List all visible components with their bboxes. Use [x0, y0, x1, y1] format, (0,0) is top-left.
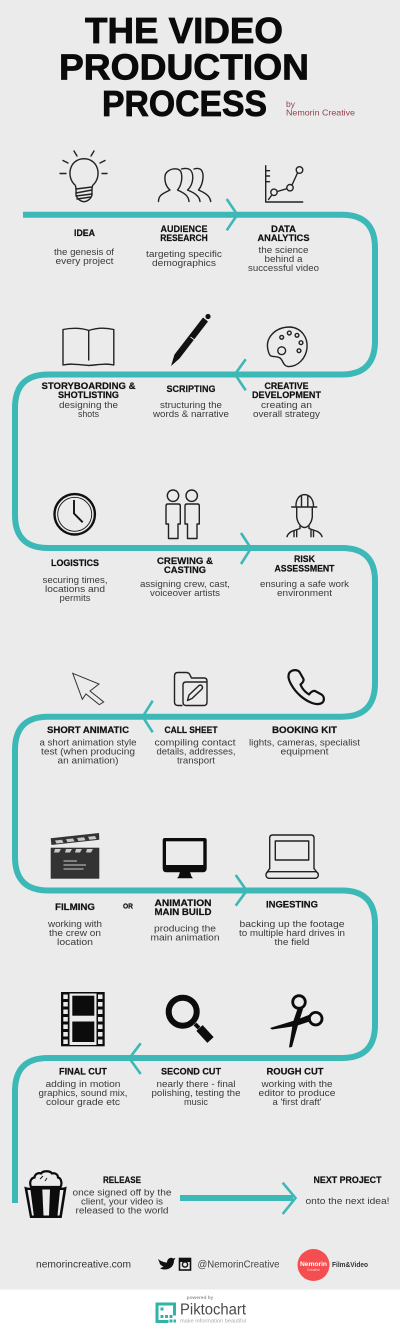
arrow: row 2 chevron: [235, 359, 246, 390]
step: audience research: RESEARCH: [160, 233, 208, 244]
logo: Nemorin Film and Video: Creative: [307, 1268, 320, 1272]
icon: worker with hard hat: [287, 495, 322, 537]
step: release: client, your video is: [81, 1196, 163, 1208]
step: creative development: overall strategy: [253, 409, 320, 420]
step: rough cut: a 'first draft': [272, 1097, 322, 1108]
byline: [286, 99, 355, 118]
icon: folder with pen: [174, 672, 207, 706]
byline: Nemorin Creative: [286, 108, 355, 118]
icon: magnifying glass: [169, 998, 210, 1040]
step: short animatic: an animation): [58, 756, 118, 766]
step: call sheet: CALL SHEET: [164, 725, 218, 736]
step: next project: onto the next idea!: [306, 1196, 390, 1207]
step: data analytics: behind a: [264, 254, 303, 265]
step: audience research: [146, 168, 222, 269]
website link: nemorincreative.com: [36, 1258, 131, 1270]
arrow: row 4 chevron: [143, 701, 153, 732]
step: risk assessment: RISK: [294, 554, 315, 565]
icon: audience silhouettes: [158, 168, 211, 202]
step: rough cut: [258, 996, 336, 1108]
icon: telephone handset: [289, 670, 324, 704]
step: crewing and casting: assigning crew, cast,: [140, 579, 230, 590]
step: release: once signed off by the: [72, 1188, 172, 1198]
step: release: released to the world: [76, 1206, 168, 1216]
step: filming: working with: [47, 919, 102, 930]
step: creative development: [252, 327, 321, 420]
footer: Piktochart band: powered by: [187, 1295, 214, 1301]
step: filming: the crew on: [49, 928, 101, 939]
step: creative development: CREATIVE: [264, 381, 309, 392]
step: logistics: LOGISTICS: [51, 558, 100, 569]
step: audience research: demographics: [152, 258, 216, 269]
step: ingesting: [239, 835, 345, 948]
step: logistics: securing times,: [42, 575, 108, 586]
footer: Piktochart band: Piktochart: [180, 1302, 247, 1318]
icon: twitter bird: [158, 1258, 176, 1270]
logo: Nemorin Film and Video: [298, 1249, 368, 1281]
or label: OR: [123, 904, 133, 910]
step: call sheet: compiling contact: [154, 738, 236, 748]
footer: Piktochart band: make information beautiful: [180, 1318, 246, 1324]
step: ingesting: to multiple hard drives in: [239, 928, 345, 939]
step: short animatic: a short animation style: [40, 738, 136, 748]
step: scripting: words & narrative: [152, 409, 229, 420]
step: ingesting: INGESTING: [266, 900, 318, 910]
title: [59, 10, 309, 124]
step: short animatic: SHORT ANIMATIC: [47, 725, 129, 736]
byline: by: [286, 99, 296, 109]
step: filming: [47, 833, 102, 948]
step: storyboarding and shotlisting: STORYBOARDING &: [42, 381, 136, 392]
icon: paint palette: [267, 327, 307, 367]
icon: two people: [166, 490, 199, 538]
step: second cut: [152, 998, 240, 1108]
logo: Nemorin Film and Video: Film&Video: [332, 1260, 368, 1269]
step: second cut: polishing, testing the: [152, 1088, 240, 1099]
step: short animatic: [40, 673, 136, 766]
step: rough cut: working with the: [260, 1079, 332, 1090]
icon: cursor arrow: [73, 673, 104, 705]
footer: Piktochart band: [0, 1290, 400, 1329]
step: final cut: colour grade etc: [46, 1097, 120, 1108]
step: idea: the genesis of: [54, 247, 114, 258]
step: risk assessment: [260, 495, 349, 599]
step: crewing and casting: [140, 490, 230, 599]
step: second cut: SECOND CUT: [161, 1066, 221, 1078]
step: storyboarding and shotlisting: shots: [78, 409, 99, 420]
step: data analytics: the science: [258, 245, 308, 256]
arrow: row 1 chevron: [227, 199, 237, 230]
title: PRODUCTION: [59, 46, 309, 88]
step: data analytics: [248, 166, 319, 274]
step: short animatic: test (when producing: [41, 746, 135, 758]
step: second cut: music: [184, 1097, 208, 1108]
step: logistics: [42, 494, 108, 604]
step: booking kit: BOOKING KIT: [272, 725, 337, 736]
step: ingesting: backing up the footage: [240, 919, 344, 930]
step: animation main build: ANIMATION: [154, 898, 212, 909]
step: rough cut: editor to produce: [258, 1088, 336, 1099]
step: audience research: targeting specific: [146, 249, 222, 260]
logo: Nemorin Film and Video: Nemorin: [300, 1261, 327, 1268]
icon: popcorn bucket: [24, 1171, 67, 1218]
step: logistics: locations and: [45, 584, 105, 595]
step: scripting: [152, 314, 229, 420]
step: filming: location: [57, 937, 93, 948]
step: final cut: FINAL CUT: [59, 1066, 107, 1078]
icon: Piktochart logo: [156, 1302, 176, 1323]
step: creative development: DEVELOPMENT: [252, 390, 321, 401]
arrow: row 5 chevron: [236, 875, 247, 906]
step: booking kit: [249, 670, 360, 758]
arrow: row 6 chevron: [129, 1043, 141, 1074]
step: crewing and casting: voiceover artists: [150, 588, 220, 599]
social handle: @NemorinCreative: [198, 1258, 280, 1270]
step: release: [24, 1171, 171, 1218]
step: release: RELEASE: [103, 1175, 141, 1186]
step: risk assessment: ensuring a safe work: [260, 579, 349, 590]
step: idea: every project: [56, 256, 114, 267]
icon: laptop: [266, 835, 318, 878]
icon: open book: [63, 328, 114, 366]
icon: scissors: [270, 996, 322, 1048]
step: ingesting: the field: [274, 937, 310, 948]
step: final cut: adding in motion: [46, 1079, 120, 1090]
step: logistics: permits: [60, 593, 91, 604]
step: call sheet: details, addresses,: [156, 746, 236, 758]
step: booking kit: equipment: [280, 746, 329, 758]
step: creative development: creating an: [261, 400, 312, 411]
icon: pen: [171, 314, 211, 366]
step: animation main build: main animation: [150, 932, 220, 944]
step: storyboarding and shotlisting: SHOTLISTING: [58, 390, 119, 401]
timeline path: [15, 215, 375, 1203]
step: audience research: AUDIENCE: [160, 224, 208, 235]
icon: film strip: [61, 992, 105, 1046]
step: rough cut: ROUGH CUT: [266, 1066, 324, 1078]
icon: instagram: [180, 1258, 190, 1270]
title: PROCESS: [102, 83, 267, 124]
step: filming: FILMING: [55, 902, 95, 913]
step: next project: NEXT PROJECT: [314, 1175, 382, 1186]
step: scripting: structuring the: [160, 400, 222, 411]
step: animation main build: [150, 838, 220, 944]
step: idea: [54, 151, 114, 267]
step: idea: IDEA: [74, 228, 95, 239]
step: risk assessment: ASSESSMENT: [274, 564, 335, 574]
step: data analytics: ANALYTICS: [258, 233, 310, 244]
step: crewing and casting: CREWING &: [157, 556, 213, 567]
step: crewing and casting: CASTING: [164, 565, 206, 576]
step: data analytics: DATA: [271, 224, 296, 235]
icon: clock: [54, 494, 95, 534]
step: second cut: nearly there - final: [156, 1079, 236, 1090]
step: storyboarding and shotlisting: [42, 328, 136, 420]
step: final cut: graphics, sound mix,: [38, 1088, 128, 1099]
step: call sheet: transport: [177, 756, 215, 766]
icon: light bulb: [60, 151, 107, 202]
step: animation main build: producing the: [154, 924, 216, 934]
arrow: row 3 chevron: [241, 533, 251, 564]
title: THE VIDEO: [85, 10, 283, 51]
step: booking kit: lights, cameras, specialist: [249, 738, 360, 748]
step: risk assessment: environment: [277, 588, 332, 599]
icon: clapperboard: [51, 833, 99, 879]
step: call sheet: [154, 672, 236, 766]
step: animation main build: MAIN BUILD: [154, 907, 212, 918]
step: scripting: SCRIPTING: [166, 384, 216, 395]
step: storyboarding and shotlisting: designing the: [59, 400, 118, 411]
step: data analytics: successful video: [248, 263, 319, 274]
step: next project: [306, 1175, 390, 1207]
step: final cut: [38, 992, 128, 1108]
arrow: release to next project: [180, 1183, 296, 1214]
icon: desktop monitor: [163, 838, 207, 878]
icon: line chart: [266, 166, 303, 202]
